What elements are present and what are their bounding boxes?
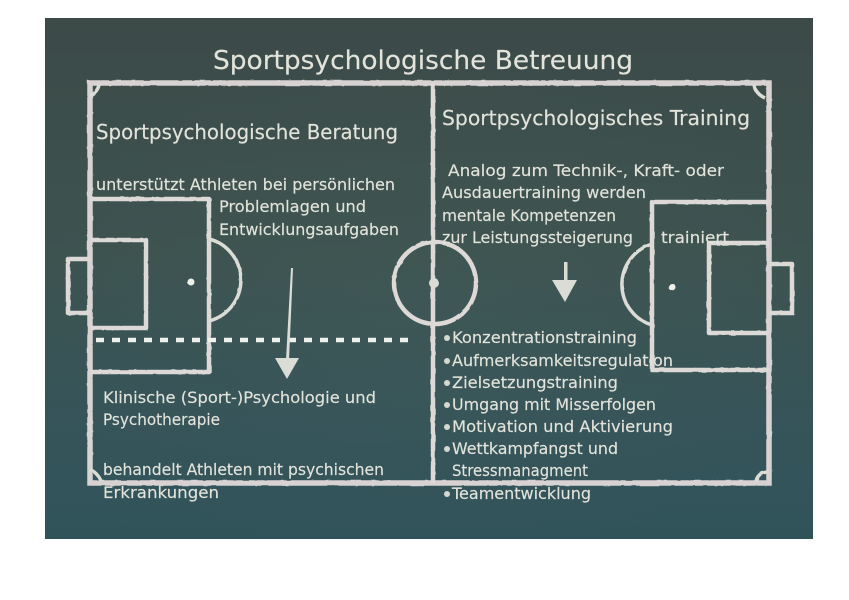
bullet list: training topics: Stressmanagment bbox=[452, 461, 588, 480]
left goal area bbox=[90, 240, 146, 328]
text block: Training description bbox=[442, 161, 729, 247]
bullet list: training topics: Wettkampfangst und bbox=[452, 439, 618, 458]
bullet list: training topics: Aufmerksamkeitsregulation bbox=[452, 351, 673, 370]
text block: clinical description bbox=[103, 460, 384, 502]
left goal bbox=[68, 259, 90, 313]
right penalty box bbox=[652, 202, 769, 370]
text block: clinical description: Erkrankungen bbox=[103, 483, 219, 502]
text block: Training description: mentale Kompetenzen bbox=[442, 206, 616, 225]
text block: clinical psychology bbox=[103, 388, 376, 429]
text block: Beratung description: Entwicklungsaufgaben bbox=[219, 220, 399, 239]
right goal bbox=[769, 264, 792, 313]
corner arcs bbox=[90, 85, 767, 481]
right goal area bbox=[709, 243, 769, 333]
dashed divider line bbox=[96, 338, 409, 342]
title: Sportpsychologische Betreuung bbox=[213, 46, 633, 76]
bullet list: training topics: Motivation und Aktivierung bbox=[452, 417, 673, 436]
panel: Beratung bbox=[96, 120, 399, 502]
bullet list: training topics bbox=[444, 328, 673, 503]
bullet list: training topics: Zielsetzungstraining bbox=[452, 373, 618, 392]
text block: Beratung description: Problemlagen und bbox=[219, 197, 366, 216]
halfway line bbox=[431, 83, 435, 483]
football pitch chalk drawing bbox=[68, 83, 792, 483]
text block: Training description: trainiert bbox=[661, 228, 729, 247]
right penalty arc bbox=[622, 244, 652, 325]
left penalty spot bbox=[188, 278, 194, 286]
heading: Beratung: Sportpsychologische Beratung bbox=[96, 120, 398, 144]
right penalty spot bbox=[668, 284, 676, 290]
pitch outline bbox=[90, 83, 769, 483]
text block: clinical description: behandelt Athleten mit psychischen bbox=[103, 460, 384, 479]
centre spot bbox=[429, 278, 439, 288]
panel: Training bbox=[442, 106, 750, 503]
text block: Training description: zur Leistungssteigerung bbox=[442, 228, 633, 247]
heading: Training: Sportpsychologisches Training bbox=[442, 106, 750, 130]
bullet list: training topics: Teamentwicklung bbox=[451, 484, 591, 503]
left penalty box bbox=[90, 199, 209, 372]
text block: Beratung description bbox=[96, 175, 399, 239]
bullet list: training topics: Konzentrationstraining bbox=[452, 328, 637, 347]
bullet list: training topics: Umgang mit Misserfolgen bbox=[452, 395, 656, 414]
text block: Training description: Ausdauertraining werden bbox=[442, 183, 646, 202]
arrow: left panel down bbox=[275, 268, 299, 379]
left penalty arc bbox=[209, 239, 241, 321]
text block: clinical psychology: Klinische (Sport-)Psychologie und bbox=[103, 388, 376, 407]
text block: Beratung description: unterstützt Athleten bei persönlichen bbox=[96, 175, 395, 194]
centre circle bbox=[394, 242, 476, 324]
text block: clinical psychology: Psychotherapie bbox=[103, 410, 220, 429]
arrow: right panel down bbox=[552, 262, 577, 302]
chalkboard background bbox=[45, 18, 813, 539]
text block: Training description: Analog zum Technik-, Kraft- oder bbox=[448, 161, 724, 180]
